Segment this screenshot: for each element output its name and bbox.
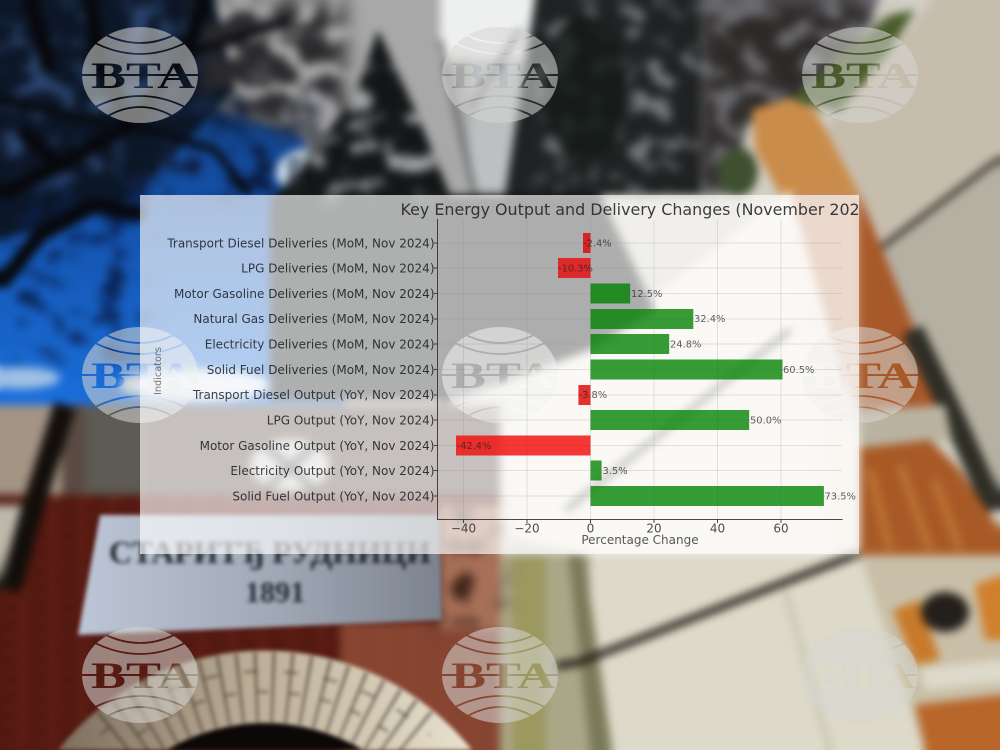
- axes spines and tick marks: [434, 219, 842, 523]
- x-axis tick labels: 40: [710, 522, 725, 536]
- value labels: 3.5%: [602, 466, 628, 477]
- value labels: -3.8%: [578, 390, 607, 401]
- y-axis category labels: Electricity Deliveries (MoM, Nov 2024): [205, 338, 434, 352]
- y-axis category labels: Transport Diesel Output (YoY, Nov 2024): [192, 388, 434, 402]
- watermark: BTA logo bottom right: [802, 630, 918, 712]
- value labels: [456, 238, 856, 502]
- value labels: -2.4%: [583, 238, 612, 250]
- y-axis category labels: Electricity Output (YoY, Nov 2024): [230, 464, 434, 478]
- y-axis category labels: Natural Gas Deliveries (MoM, Nov 2024): [193, 312, 434, 326]
- x-axis tick labels: 0: [587, 522, 594, 536]
- value labels: -10.3%: [558, 264, 593, 274]
- background: plaque reading old mines 1891: [78, 515, 442, 635]
- y-axis category labels: Motor Gasoline Deliveries (MoM, Nov 2024): [174, 287, 434, 301]
- watermark: BTA logo bottom left: [82, 627, 198, 723]
- value labels: 12.5%: [631, 289, 662, 300]
- watermark: BTA logo middle left: [82, 327, 198, 423]
- watermark: BTA logo top centre: [442, 27, 558, 123]
- y-axis category labels: Transport Diesel Deliveries (MoM, Nov 2024): [166, 236, 434, 250]
- x-axis tick labels: 60: [773, 522, 789, 536]
- value labels: 73.5%: [824, 492, 856, 502]
- grid lines: [438, 220, 842, 519]
- watermark: BTA logo middle right: [830, 327, 918, 423]
- background: plaque reading old mines 1891: СТАРИТЂ РУДНИЦИ: [109, 534, 431, 570]
- value labels: 24.8%: [670, 340, 701, 350]
- value labels: 60.5%: [783, 365, 814, 376]
- panel: translucent chart card: [140, 195, 859, 554]
- x-axis title: Percentage Change: [581, 533, 699, 547]
- value labels: 50.0%: [750, 416, 781, 426]
- watermark: BTA logo bottom centre: [442, 627, 558, 723]
- y-axis title: Indicators: [153, 347, 164, 395]
- y-axis category labels: LPG Deliveries (MoM, Nov 2024): [241, 262, 434, 276]
- background: plaque reading old mines 1891: 1891: [245, 576, 305, 609]
- y-axis category labels: [166, 236, 434, 504]
- background: brick arch: [58, 650, 472, 750]
- value labels: 32.4%: [694, 314, 725, 325]
- value labels: -42.4%: [456, 441, 491, 452]
- watermark: BTA logo centre: [442, 327, 558, 423]
- x-axis tick labels: −20: [514, 522, 540, 536]
- x-axis tick labels: [451, 522, 789, 536]
- chart title: Key Energy Output and Delivery Changes (November 2024): [400, 200, 876, 219]
- bars: percentage change by indicator: [456, 233, 824, 506]
- watermark: BTA logo top right: [802, 27, 918, 123]
- y-axis category labels: LPG Output (YoY, Nov 2024): [267, 414, 434, 428]
- chart: horizontal bar chart of energy changes: [153, 200, 876, 547]
- x-axis tick labels: −40: [451, 522, 476, 536]
- y-axis category labels: Motor Gasoline Output (YoY, Nov 2024): [200, 439, 434, 453]
- y-axis category labels: Solid Fuel Deliveries (MoM, Nov 2024): [207, 363, 434, 377]
- y-axis category labels: Solid Fuel Output (YoY, Nov 2024): [232, 490, 434, 504]
- x-axis tick labels: 20: [646, 522, 662, 536]
- watermark: BTA logo top left: [82, 27, 198, 123]
